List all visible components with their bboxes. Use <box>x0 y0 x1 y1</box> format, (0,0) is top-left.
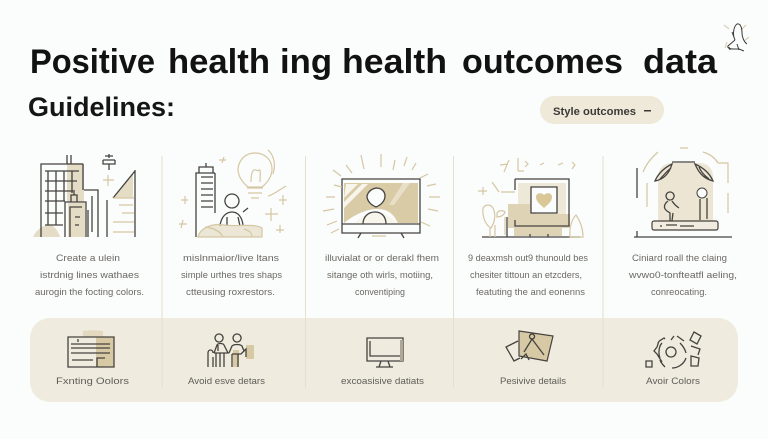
column 1: buildings <box>33 154 144 298</box>
text block 3: sitange oth wirls, motiing, <box>327 270 433 281</box>
panel item 1: document icon and label <box>56 330 130 386</box>
text block 3 <box>325 253 439 298</box>
text block 1: aurogin the focting colors. <box>35 287 144 298</box>
panel item 2: people icon and label: Avoid esve detars <box>188 376 265 387</box>
panel item 4: photos icon and label <box>500 331 566 387</box>
text block 4: chesiter tittoun an etzcders, <box>470 270 582 281</box>
column 2: idea <box>179 150 287 298</box>
text block 1: istrdnig lines wathaes <box>40 270 139 281</box>
panel item 3: monitor icon and label <box>341 338 424 387</box>
panel item 5: gear icon and label: Avoir Colors <box>646 376 700 387</box>
text block 4: featuting the and eonenns <box>476 287 585 298</box>
panel item 1: document icon and label: Fxnting Oolors <box>56 376 130 386</box>
title <box>30 43 718 81</box>
bottom panel background <box>30 318 738 402</box>
column 4: framed heart <box>468 158 588 298</box>
text block 5: wvwo0-tonfteatfl aeling, <box>628 270 737 281</box>
icon: stage with figures and curtains <box>634 148 732 237</box>
panel item 4: photos icon and label: Pesivive details <box>500 376 566 387</box>
text block 3: conventiping <box>355 287 405 298</box>
text block 4: 9 deaxmsh out9 thunould bes <box>468 253 588 264</box>
column 5: stage <box>628 148 737 298</box>
title: health <box>168 43 270 81</box>
panel item 2: people icon and label <box>188 334 265 387</box>
text block 2: ctteusing roxrestors. <box>186 287 275 298</box>
title: data <box>643 43 718 81</box>
pill: style outcomes: Style outcomes <box>553 106 636 118</box>
panel item 5: gear icon and label <box>646 332 701 387</box>
icon: monitor with portrait and rays <box>323 154 440 238</box>
subtitle: guidelines: Guidelines: <box>28 92 175 122</box>
text block 1 <box>35 253 144 298</box>
title: ing <box>280 43 332 81</box>
text block 5: conreocating. <box>651 287 707 298</box>
text block 5 <box>628 253 737 298</box>
title: outcomes <box>462 43 623 81</box>
title: Positive <box>30 43 155 81</box>
pill: style outcomes <box>540 96 664 124</box>
icon: city buildings <box>33 154 135 237</box>
icon: framed heart on a sofa <box>478 158 583 237</box>
column 3: monitor <box>323 154 440 298</box>
text block 2: mislnmaior/live ltans <box>183 253 279 264</box>
icon: corner sketch figure <box>724 24 749 51</box>
text block 5: Ciniard roall the claing <box>632 253 727 264</box>
text block 1: Create a ulein <box>56 253 120 264</box>
text block 2: simple urthes tres shaps <box>181 270 282 281</box>
panel item 3: monitor icon and label: excoasisive datiats <box>341 376 424 387</box>
column dividers <box>162 156 603 388</box>
text block 4 <box>468 253 588 298</box>
title: health <box>342 43 447 81</box>
icon: tower, person and light bulb <box>179 150 287 237</box>
text block 3: illuvialat or or derakl fhem <box>325 253 439 264</box>
text block 2 <box>181 253 282 298</box>
